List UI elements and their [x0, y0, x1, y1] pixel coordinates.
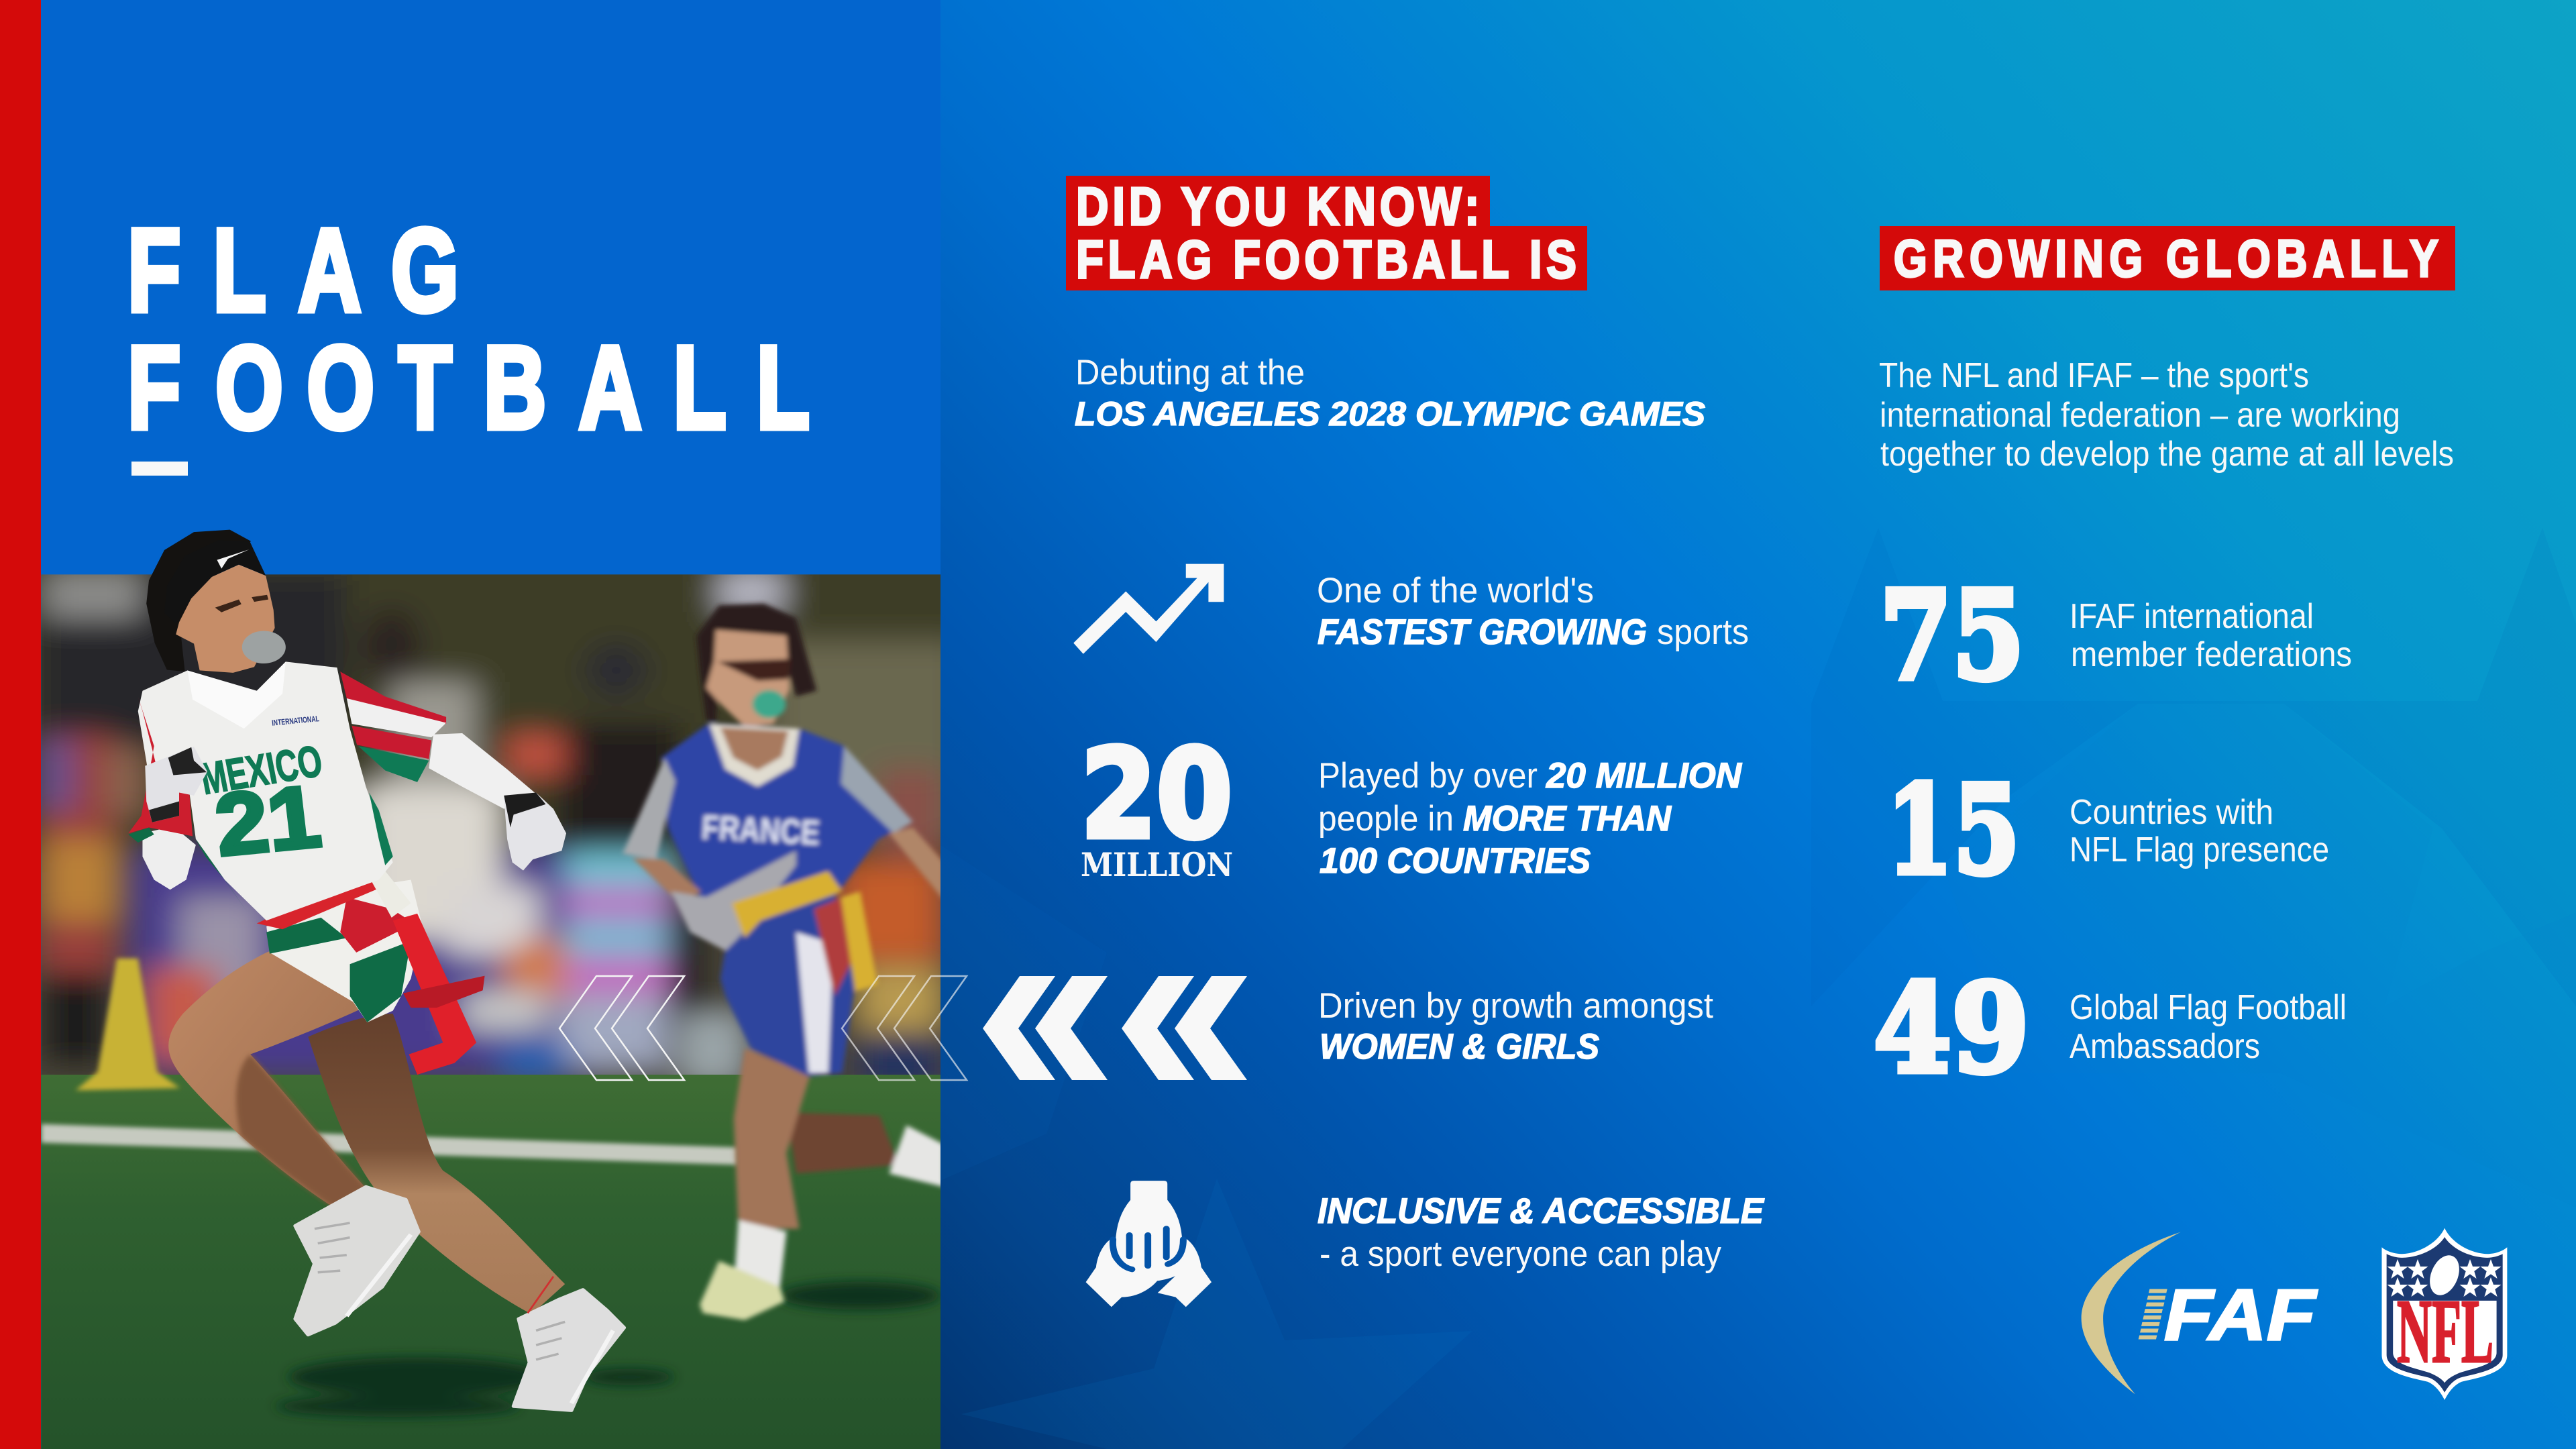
headband — [164, 540, 266, 624]
stat: 49 ambassadors: 49 — [1874, 957, 2029, 1100]
ground shadows — [276, 1282, 941, 1417]
turf — [38, 1075, 950, 1449]
text: 20 million players: MORE THAN — [1463, 799, 1672, 839]
right arm sleeve — [429, 733, 536, 809]
red side bar — [0, 0, 41, 1449]
text: women and girls — [1318, 986, 1713, 1067]
logo: IFAF — [2082, 1232, 2318, 1394]
stat: 15 countries: NFL Flag presence — [2070, 830, 2329, 869]
face — [176, 565, 275, 673]
background stars — [941, 528, 2576, 1449]
stat: 15 countries — [1886, 758, 2329, 902]
stat: 20 million: 20 — [1081, 723, 1232, 865]
panel: title block background — [41, 0, 941, 574]
left forearm — [142, 826, 196, 890]
text: 20 million players: 100 COUNTRIES — [1320, 841, 1591, 881]
text: inclusive and accessible: - a sport everyone can play — [1320, 1234, 1721, 1274]
shoe laces and soles — [315, 1223, 613, 1403]
jersey lettering: 21 — [211, 767, 325, 874]
text: fastest growing — [1317, 571, 1749, 652]
text: inclusive and accessible: INCLUSIVE & ACCESSIBLE — [1318, 1191, 1765, 1231]
logo: NFL shield — [2381, 1228, 2507, 1400]
title underscore bar — [131, 462, 188, 476]
sleeve stripes — [340, 672, 446, 724]
stat: 75 federations: 75 — [1880, 564, 2025, 707]
text: 20 million players: Played by over — [1318, 756, 1538, 796]
mouthguard — [242, 631, 286, 663]
text: NFL and IFAF partnership: together to develop the game at all levels — [1880, 435, 2454, 474]
logo: NFL shield: NFL — [2397, 1281, 2493, 1382]
hair and braid — [146, 530, 251, 672]
stat: 75 federations: IFAF international — [2070, 597, 2314, 636]
title: FLAG FOOTBALL: FOOTBALL — [127, 322, 810, 453]
solid chevrons icon — [983, 976, 1247, 1080]
shoes — [295, 1187, 419, 1335]
waist belt — [257, 871, 385, 929]
front leg — [168, 946, 376, 1208]
icon: rising trend arrow — [1073, 564, 1224, 654]
second player: France — [623, 604, 944, 1320]
jersey lettering: MEXICO — [197, 736, 326, 804]
jersey lettering — [197, 736, 326, 874]
stat: 15 countries: 15 — [1886, 758, 2020, 902]
main player: Mexico — [128, 530, 624, 1410]
heading: did you know: FLAG FOOTBALL IS — [1076, 229, 1576, 289]
red flag — [393, 914, 476, 1075]
turtleneck collar — [187, 661, 286, 729]
stat: 75 federations — [1880, 564, 2352, 707]
right glove — [504, 792, 566, 871]
heading: growing globally: GROWING GLOBALLY — [1894, 229, 2438, 288]
heading: did you know: DID YOU KNOW: — [1076, 176, 1479, 236]
text: women and girls: WOMEN & GIRLS — [1320, 1027, 1599, 1067]
logo: IFAF: FAF — [2164, 1274, 2318, 1355]
text: 20 million players: people in — [1318, 799, 1454, 839]
text: 20 million players — [1318, 756, 1743, 881]
panel: gradient background — [941, 0, 2576, 1449]
stat: 15 countries: Countries with — [2070, 793, 2273, 832]
text: fastest growing: sports — [1657, 612, 1749, 652]
rear leg — [308, 1014, 565, 1314]
text: NFL and IFAF partnership: international federation – are working — [1880, 396, 2400, 435]
text: Olympic debut: LOS ANGELES 2028 OLYMPIC GAMES — [1075, 395, 1705, 433]
icon: joined hands — [1086, 1181, 1212, 1307]
text: NFL and IFAF partnership: The NFL and IFAF – the sport's — [1879, 356, 2309, 395]
stat: 49 ambassadors: Ambassadors — [2070, 1027, 2260, 1066]
hollow chevrons over photo — [559, 976, 967, 1080]
text: NFL and IFAF partnership — [1879, 356, 2454, 474]
second player: France: FRANCE — [700, 807, 821, 853]
facial features — [215, 595, 268, 612]
stat: 20 million: MILLION — [1081, 845, 1233, 884]
shorts — [266, 880, 423, 1022]
blurred stadium background — [41, 574, 941, 1126]
text: fastest growing: One of the world's — [1317, 571, 1594, 610]
belt clip — [369, 871, 411, 918]
ankle string — [528, 1277, 553, 1313]
stat: 75 federations: member federations — [2071, 635, 2352, 674]
text: women and girls: Driven by growth amongst — [1318, 986, 1713, 1026]
text: inclusive and accessible — [1318, 1191, 1765, 1274]
title: FLAG FOOTBALL: FLAG — [127, 205, 459, 336]
title: FLAG FOOTBALL — [127, 205, 810, 453]
text: fastest growing: FASTEST GROWING — [1318, 612, 1647, 652]
text: Olympic debut: Debuting at the — [1075, 353, 1305, 392]
white yard line — [41, 1124, 739, 1165]
traffic cone — [76, 959, 180, 1090]
stat: 49 ambassadors — [1874, 957, 2347, 1100]
heading: did you know — [1066, 176, 1587, 290]
left glove — [145, 747, 207, 822]
text: Olympic debut — [1075, 353, 1705, 433]
photo: flag football players — [41, 530, 941, 1449]
main player: Mexico: INTERNATIONAL — [271, 714, 320, 728]
text: 20 million players: 20 MILLION — [1546, 756, 1743, 796]
jersey — [138, 661, 393, 920]
stat: 49 ambassadors: Global Flag Football — [2070, 988, 2347, 1027]
